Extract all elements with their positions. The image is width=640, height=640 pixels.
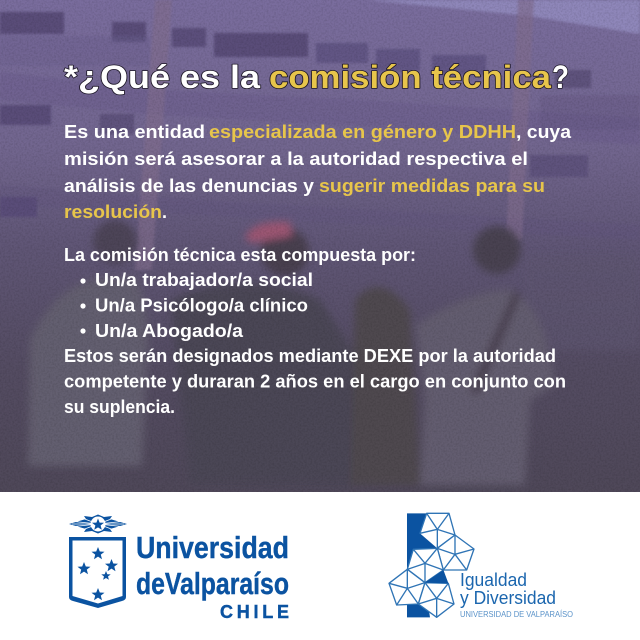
logo wordmark: deValparaíso xyxy=(136,566,289,601)
composition list: Un/a Abogado/a xyxy=(95,321,244,341)
footer white band xyxy=(0,492,640,640)
composition list: Un/a Psicólogo/a clínico xyxy=(95,296,308,316)
logo wordmark: CHILE xyxy=(220,602,289,622)
background photo: building and people with purple overlay xyxy=(0,0,640,492)
title: ? xyxy=(552,59,569,95)
person center-right xyxy=(350,287,420,485)
definition paragraph: misión será asesorar a la autoridad respectiva el xyxy=(64,149,528,169)
logo wordmark: Universidad xyxy=(136,530,289,565)
composition list xyxy=(64,245,416,341)
logo wordmark xyxy=(136,530,289,622)
definition paragraph xyxy=(64,122,572,222)
icon: shield with stars xyxy=(69,537,126,608)
definition paragraph: especializada en género y DDHH xyxy=(209,122,516,142)
logo: Universidad de Valparaíso xyxy=(69,514,289,622)
designation paragraph xyxy=(64,346,566,417)
person left xyxy=(28,278,148,466)
definition paragraph: sugerir medidas para su xyxy=(319,176,545,196)
logo wordmark: UNIVERSIDAD DE VALPARAÍSO xyxy=(460,610,573,619)
designation paragraph: competente y duraran 2 años en el cargo en conjunto con xyxy=(64,372,566,392)
logo: Igualdad y Diversidad xyxy=(389,513,573,619)
logo wordmark xyxy=(460,570,573,619)
person center-left xyxy=(170,282,365,485)
icon: sunburst with star xyxy=(69,514,127,534)
composition list: La comisión técnica esta compuesta por: xyxy=(64,245,416,265)
definition paragraph: resolución xyxy=(64,202,162,222)
definition paragraph: Es una entidad xyxy=(64,122,205,142)
designation paragraph: Estos serán designados mediante DEXE por la autoridad xyxy=(64,346,556,366)
designation paragraph: su suplencia. xyxy=(64,397,175,417)
title: *¿Qué es la xyxy=(64,59,260,95)
definition paragraph: , cuya xyxy=(516,122,572,142)
title xyxy=(64,59,569,95)
definition paragraph: análisis de las denuncias y xyxy=(64,176,314,196)
composition list: Un/a trabajador/a social xyxy=(95,270,313,290)
person right xyxy=(416,290,555,485)
icon: geometric network xyxy=(389,513,474,617)
logo wordmark: y Diversidad xyxy=(460,588,556,608)
logo wordmark: Igualdad xyxy=(460,570,527,590)
title: comisión técnica xyxy=(269,59,551,95)
definition paragraph: . xyxy=(162,202,167,222)
